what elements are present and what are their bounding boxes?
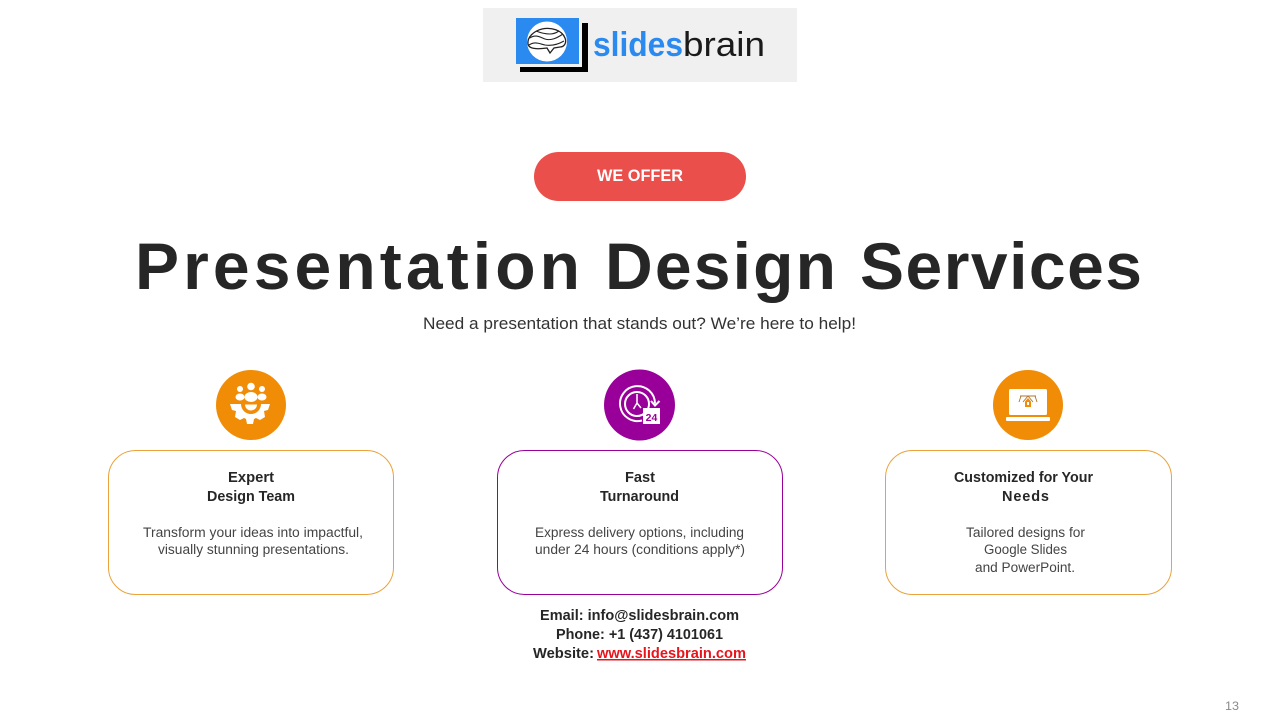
title: Presentation [135,229,580,303]
title [135,229,1142,303]
contact details [533,607,746,662]
icon: laptop design [993,370,1063,440]
panel body: under 24 hours (conditions apply*) [535,542,745,557]
panel: customized for your needs [886,450,1172,594]
panel: expert design team [108,450,394,594]
page number: 13 [1225,699,1239,713]
logo: slidesbrain: slides [593,26,683,64]
panel heading: Expert [228,470,274,486]
panel heading: Turnaround [600,489,679,505]
logo: slidesbrain [483,8,797,82]
panel body: visually stunning presentations. [158,542,349,557]
icon: 24-hour clock: 24 [646,412,657,424]
panel body [966,525,1085,575]
logo: slidesbrain: brain [683,26,765,64]
panel body: Express delivery options, including [535,525,744,540]
panel body [143,525,363,557]
contact details: www.slidesbrain.com [596,645,746,662]
panel heading [207,470,295,505]
icon: 24-hour clock [604,370,675,440]
panel heading: Needs [1002,489,1049,505]
icon: team gear [216,370,286,440]
panel body: Tailored designs for [966,525,1085,540]
contact details: Email: info@slidesbrain.com [540,607,739,624]
panel body [535,525,745,557]
contact details: Website: [533,645,594,662]
panel heading [600,470,679,505]
panel heading: Design Team [207,489,295,505]
panel body: Transform your ideas into impactful, [143,525,363,540]
title: Services [860,229,1142,303]
panel body: Google Slides [984,542,1067,557]
panel heading: Fast [625,470,655,486]
title: Design [605,229,836,303]
panel heading [954,470,1093,505]
panel heading: Customized for Your [954,470,1093,486]
subtitle: Need a presentation that stands out? We’re here to help! [423,314,856,333]
panel: fast turnaround [498,450,782,594]
panel body: and PowerPoint. [975,560,1075,575]
contact details: Phone: +1 (437) 4101061 [556,626,723,643]
badge: we offer: WE OFFER [597,166,683,185]
badge: we offer [534,152,746,201]
